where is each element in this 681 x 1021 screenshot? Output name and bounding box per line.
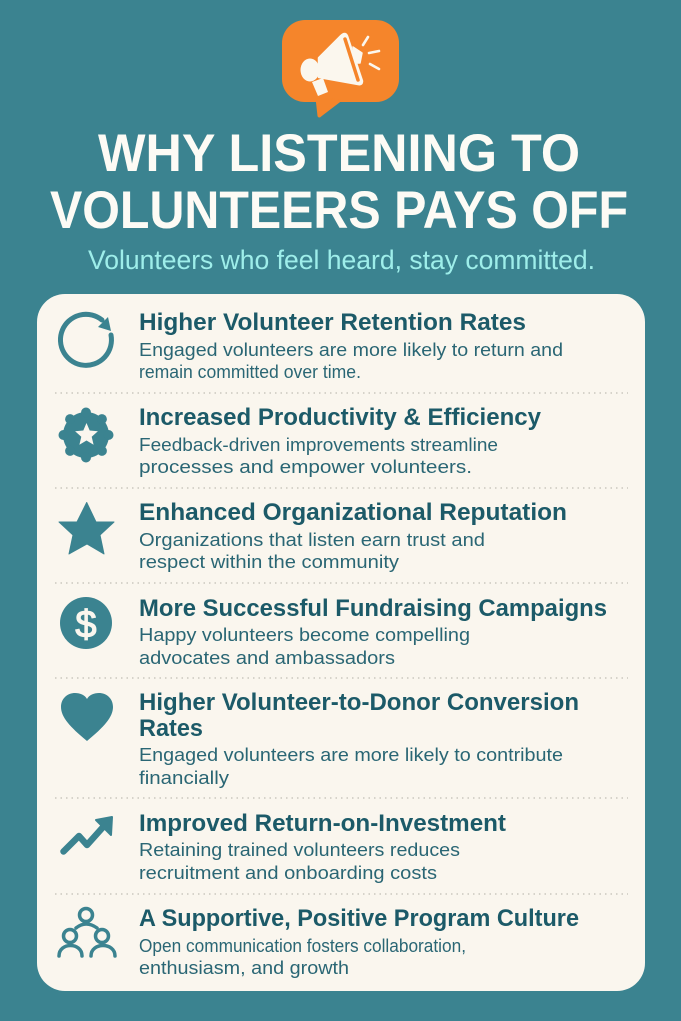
item: donor conversion (139, 689, 579, 788)
icon: rising arrow (64, 817, 112, 852)
item: productivity (139, 404, 541, 477)
item: culture: enthusiasm, and growth (139, 958, 349, 978)
item: productivity: Increased Productivity & Efficiency (139, 404, 541, 431)
item: reputation: respect within the community (139, 552, 399, 572)
item: ROI (139, 810, 506, 883)
title (50, 124, 628, 240)
item: fundraising (139, 595, 607, 668)
item: fundraising: Happy volunteers become compelling (139, 625, 470, 645)
subtitle: Volunteers who feel heard, stay committed. (88, 245, 595, 275)
item: retention: Higher Volunteer Retention Rates (139, 309, 526, 336)
icon: people network (59, 908, 115, 956)
icon: megaphone speech bubble (282, 20, 399, 117)
item: fundraising: More Successful Fundraising Campaigns (139, 595, 607, 622)
icon: star (59, 502, 114, 554)
item: ROI: Retaining trained volunteers reduces (139, 840, 460, 860)
item: ROI: Improved Return-on-Investment (139, 810, 506, 837)
item: productivity: processes and empower volunteers. (139, 457, 472, 477)
panel: benefits list (37, 294, 645, 991)
item: retention (139, 309, 563, 382)
icon: circular arrow (60, 314, 111, 365)
title: WHY LISTENING TO (98, 124, 580, 183)
icon: dollar coin (60, 597, 112, 649)
item: retention: Engaged volunteers are more likely to return and (139, 340, 563, 360)
item: donor conversion: financially (139, 768, 229, 788)
item: ROI: recruitment and onboarding costs (139, 863, 437, 883)
item: fundraising: advocates and ambassadors (139, 648, 395, 668)
item: retention: remain committed over time. (139, 362, 361, 382)
icon: dollar coin: $ (75, 604, 97, 646)
item: reputation (139, 499, 567, 572)
item: donor conversion: Engaged volunteers are more likely to contribute (139, 745, 563, 765)
item: productivity: Feedback-driven improvements streamline (139, 435, 498, 455)
item: culture (139, 905, 579, 978)
item: donor conversion: Rates (139, 715, 203, 742)
item: reputation: Enhanced Organizational Reputation (139, 499, 567, 526)
icon: gear with star (58, 408, 114, 462)
item: culture: A Supportive, Positive Program Culture (139, 905, 579, 932)
title: VOLUNTEERS PAYS OFF (50, 181, 628, 240)
item: reputation: Organizations that listen earn trust and (139, 530, 485, 550)
item: donor conversion: Higher Volunteer-to-Donor Conversion (139, 689, 579, 716)
icon: heart (61, 693, 113, 741)
item: culture: Open communication fosters collaboration, (139, 936, 466, 956)
